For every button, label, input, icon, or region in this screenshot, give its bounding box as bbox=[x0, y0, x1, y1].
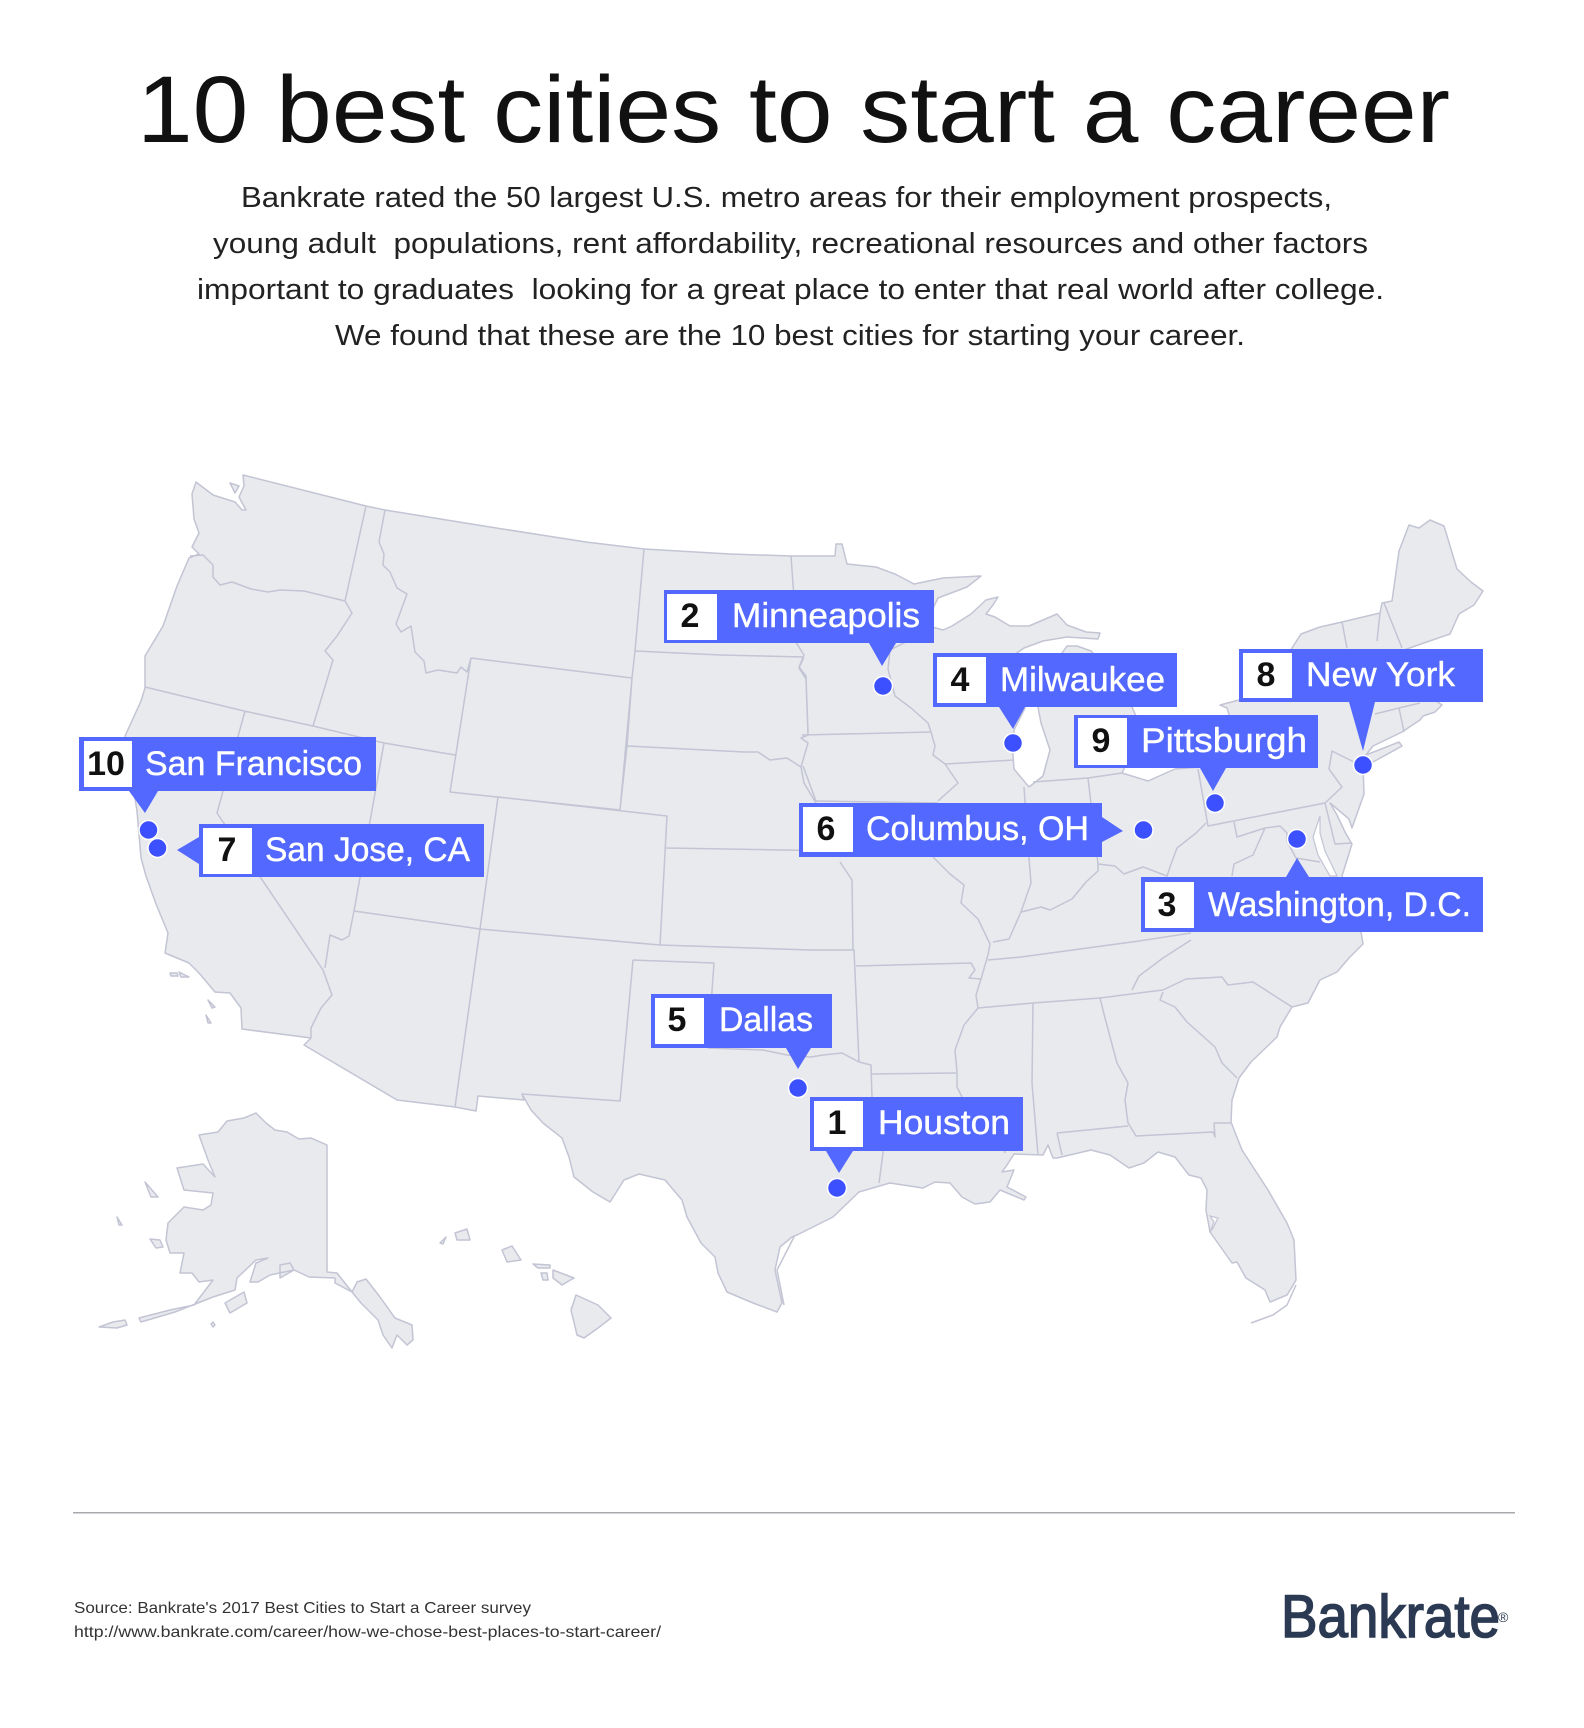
callout: 1 Houston: 1 bbox=[828, 1104, 846, 1142]
callout: 4 Milwaukee bbox=[933, 653, 1177, 752]
callout: 6 Columbus, OH: 6 bbox=[817, 810, 835, 848]
Hawaii bbox=[440, 1229, 611, 1338]
callout: 6 Columbus, OH: Columbus, OH bbox=[866, 810, 1089, 848]
callout: 10 San Francisco bbox=[79, 737, 376, 840]
callout: 2 Minneapolis: Minneapolis bbox=[732, 597, 920, 635]
callout: 1 Houston bbox=[810, 1097, 1023, 1198]
callout: 7 San Jose, CA: San Jose, CA bbox=[265, 831, 470, 869]
callout: 10 San Francisco: San Francisco bbox=[145, 745, 362, 783]
coastal islands bbox=[170, 483, 239, 1023]
callout: 7 San Jose, CA: 7 bbox=[218, 831, 236, 869]
callout: 3 Washington, D.C.: Washington, D.C. bbox=[1208, 886, 1471, 924]
Alaska bbox=[99, 1113, 413, 1348]
callout: 8 New York bbox=[1239, 649, 1483, 774]
callout: 9 Pittsburgh bbox=[1074, 715, 1318, 812]
source note bbox=[74, 1600, 662, 1641]
callout: 9 Pittsburgh: 9 bbox=[1092, 722, 1110, 760]
callout: 5 Dallas bbox=[651, 994, 832, 1098]
Chesapeake Bay bbox=[1313, 816, 1337, 876]
callout: 4 Milwaukee: 4 bbox=[951, 661, 970, 699]
intro paragraph: Bankrate rated the 50 largest U.S. metro areas for their employment prospects, bbox=[241, 182, 1332, 214]
callout: 2 Minneapolis bbox=[664, 590, 934, 696]
source note: http://www.bankrate.com/career/how-we-chose-best-places-to-start-career/ bbox=[74, 1624, 662, 1641]
contiguous states outline bbox=[125, 475, 1483, 1312]
map of the United States bbox=[99, 475, 1483, 1348]
intro paragraph: important to graduates looking for a great place to enter that real world after college. bbox=[197, 274, 1384, 306]
callout: 8 New York: New York bbox=[1306, 656, 1456, 694]
callout: 1 Houston: Houston bbox=[878, 1104, 1010, 1142]
callout: 5 Dallas: 5 bbox=[668, 1001, 686, 1039]
callout: 4 Milwaukee: Milwaukee bbox=[1000, 661, 1165, 699]
state borders bbox=[145, 506, 1420, 1323]
Bankrate logo: Bankrate bbox=[1281, 1583, 1500, 1650]
callout: 7 San Jose, CA bbox=[148, 824, 484, 877]
callout: 6 Columbus, OH bbox=[799, 803, 1153, 857]
intro paragraph: young adult populations, rent affordability, recreational resources and other factors bbox=[213, 228, 1368, 260]
callout: 8 New York: 8 bbox=[1257, 656, 1275, 694]
callout: 10 San Francisco: 10 bbox=[87, 745, 125, 783]
source note: Source: Bankrate's 2017 Best Cities to Start a Career survey bbox=[74, 1600, 531, 1617]
Tampa Bay bbox=[1210, 1216, 1218, 1232]
callout: 3 Washington, D.C.: 3 bbox=[1158, 886, 1176, 924]
callout: 2 Minneapolis: 2 bbox=[681, 597, 699, 635]
intro paragraph: We found that these are the 10 best cities for starting your career. bbox=[335, 320, 1245, 352]
title: 10 best cities to start a career bbox=[137, 57, 1450, 163]
Bankrate logo: ® bbox=[1498, 1609, 1509, 1625]
callout: 5 Dallas: Dallas bbox=[719, 1001, 813, 1039]
callout: 9 Pittsburgh: Pittsburgh bbox=[1141, 722, 1307, 760]
intro paragraph bbox=[197, 182, 1384, 352]
callout: 3 Washington, D.C. bbox=[1141, 830, 1483, 932]
